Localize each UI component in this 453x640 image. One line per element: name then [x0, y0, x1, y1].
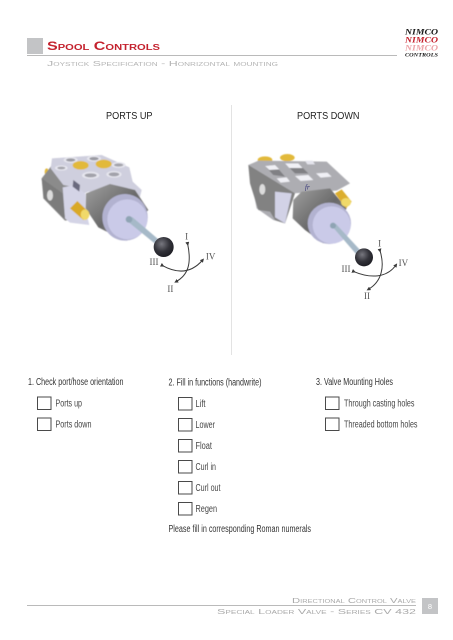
mark on valve: fr — [305, 182, 310, 191]
panel: port/hose orientation checklist: 1. Check port/hose orientation — [28, 377, 124, 388]
direction arrows: I — [185, 231, 188, 241]
panel: valve mounting holes checklist — [316, 377, 418, 430]
header: section title bar — [27, 38, 397, 56]
footer — [27, 596, 438, 616]
joystick ball — [154, 237, 174, 257]
direction arrows: I — [378, 238, 381, 248]
panel: functions checklist: Regen — [196, 504, 217, 515]
panel: functions checklist: Curl out — [196, 483, 221, 494]
subtitle: Joystick Specification - Honrizontal mounting — [47, 59, 278, 68]
panel: valve mounting holes checklist: 3. Valve Mounting Holes — [316, 377, 393, 388]
illustration: joystick valve, ports down — [248, 154, 409, 301]
panel: functions checklist: Lift — [196, 399, 206, 410]
logo: Nimco Controls: NIMCO — [404, 26, 438, 36]
direction arrows — [342, 238, 409, 301]
heading: ports up: PORTS UP — [106, 111, 153, 122]
panel: functions checklist — [168, 378, 311, 535]
logo: Nimco Controls: NIMCO — [404, 42, 438, 52]
logo: Nimco Controls: NIMCO — [404, 34, 438, 44]
direction arrows — [150, 231, 216, 294]
panel: port/hose orientation checklist: Ports up — [56, 398, 82, 410]
direction arrows: IV — [206, 251, 216, 261]
footer: Directional Control Valve — [292, 596, 417, 605]
page number: 8 — [428, 602, 432, 611]
direction arrows: III — [342, 264, 350, 274]
note: Please fill in corresponding Roman numerals — [168, 524, 311, 535]
panel: functions checklist: Float — [196, 441, 212, 452]
panel: functions checklist: Lower — [196, 420, 216, 431]
panel: functions checklist: Curl in — [196, 462, 216, 473]
direction arrows: II — [167, 284, 173, 294]
logo: Nimco Controls: CONTROLS — [405, 54, 438, 58]
panel: functions checklist: 2. Fill in functions (handwrite) — [168, 378, 262, 388]
direction arrows: III — [150, 257, 158, 267]
panel: port/hose orientation checklist: Ports down — [56, 420, 92, 430]
logo: Nimco Controls — [404, 26, 438, 58]
page number — [422, 598, 438, 614]
direction arrows: II — [364, 291, 370, 301]
heading: ports down: PORTS DOWN — [297, 111, 360, 122]
footer: Special Loader Valve - Series CV 432 — [217, 607, 416, 616]
panel: port/hose orientation checklist — [28, 377, 124, 430]
title: Spool Controls — [47, 41, 161, 53]
joystick ball — [355, 248, 373, 266]
illustration: joystick valve, ports up — [42, 155, 216, 294]
panel: valve mounting holes checklist: Through casting holes — [344, 398, 415, 410]
panel: valve mounting holes checklist: Threaded bottom holes — [344, 420, 418, 430]
direction arrows: IV — [399, 258, 409, 268]
